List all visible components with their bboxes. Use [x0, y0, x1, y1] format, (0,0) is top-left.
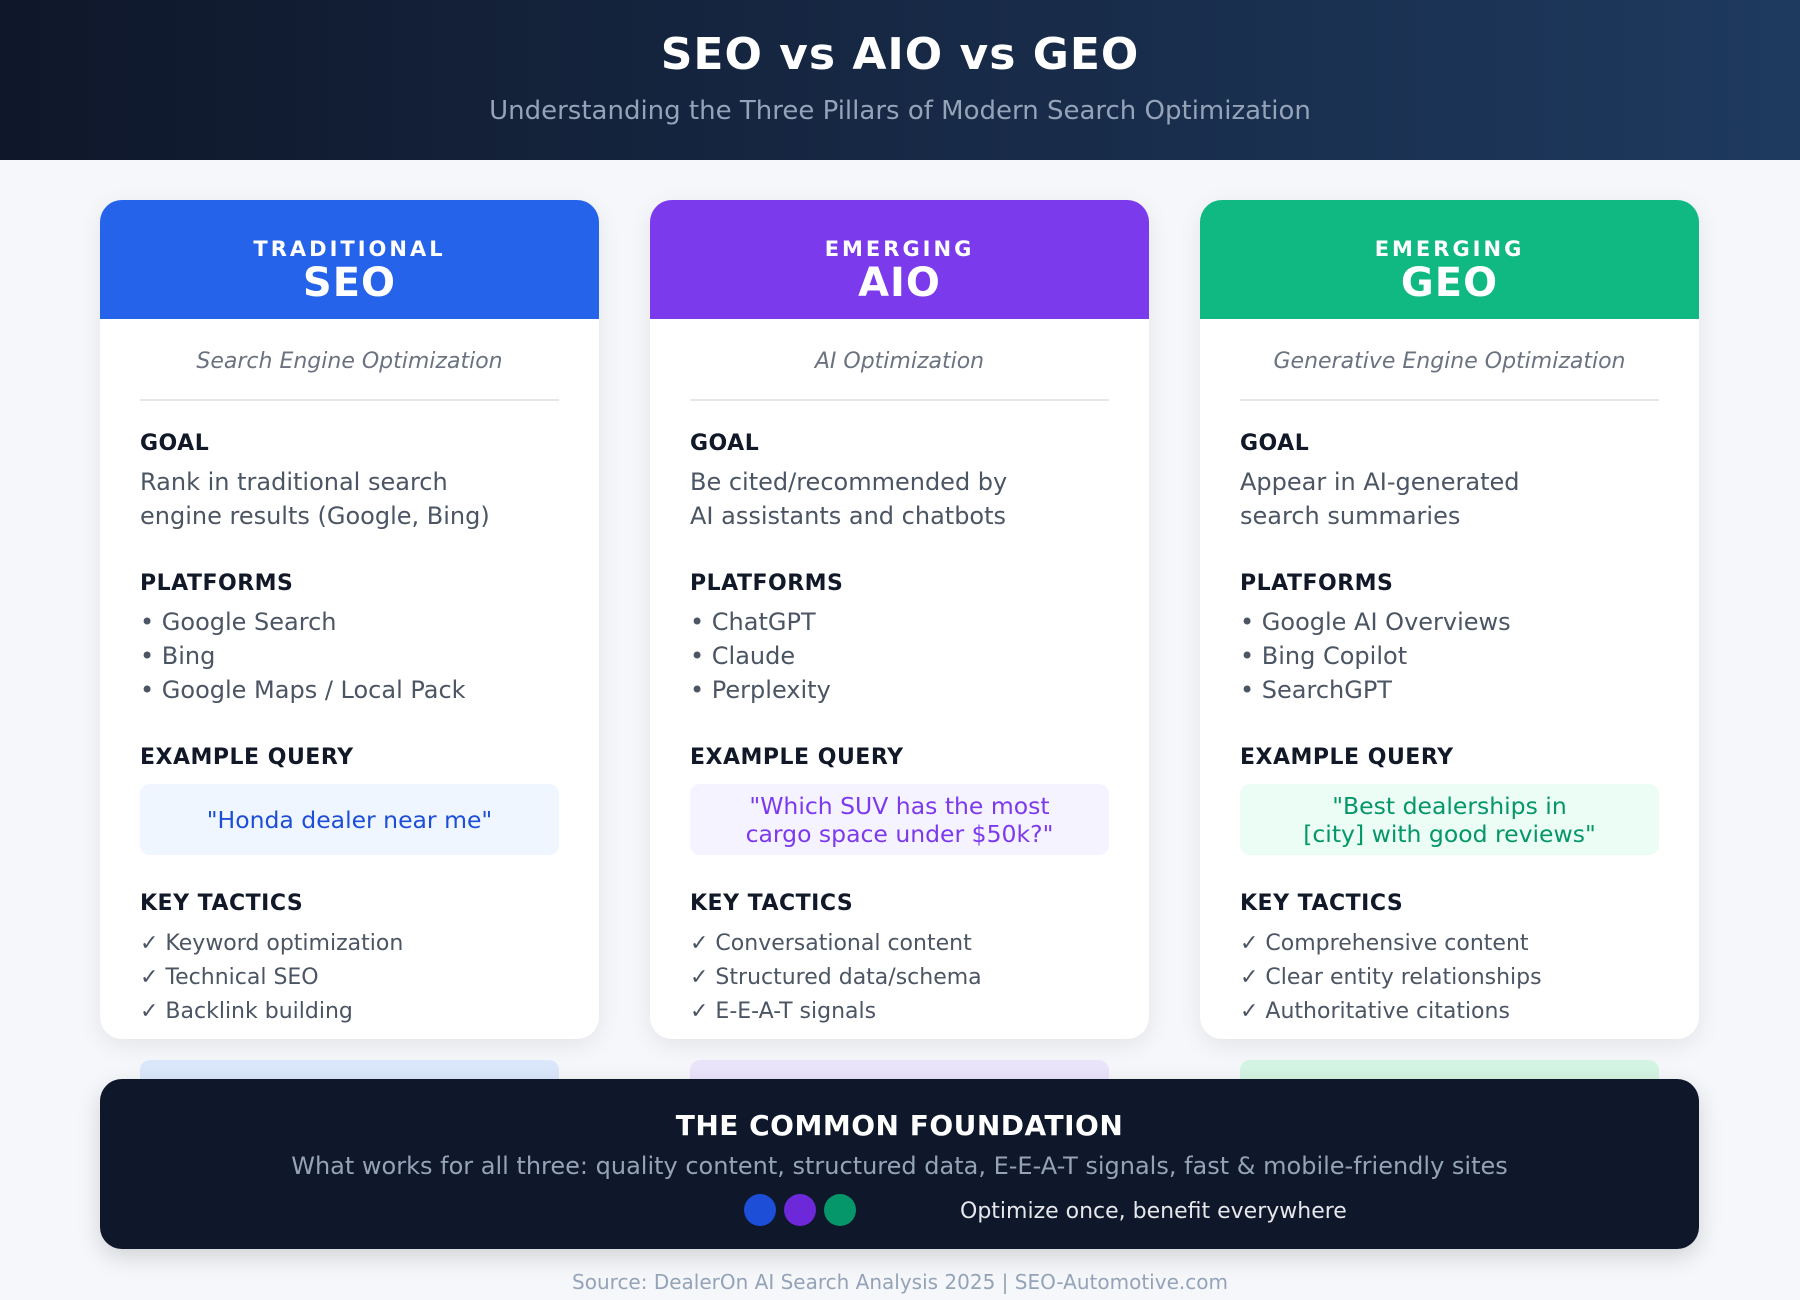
foundation title: THE COMMON FOUNDATION [676, 1109, 1123, 1142]
icon: dots [744, 1194, 856, 1226]
query box: [city] with good reviews" [1303, 820, 1596, 848]
text: goal [1240, 468, 1519, 530]
list: platforms [140, 608, 466, 704]
list: tactics: ✓ Authoritative citations [1240, 999, 1510, 1024]
header band: SEO [100, 200, 599, 319]
heading: goal: GOAL [1240, 431, 1309, 456]
text: goal [690, 468, 1007, 530]
query box: "Best dealerships in [1332, 792, 1567, 820]
text: goal: AI assistants and chatbots [690, 502, 1006, 530]
heading: key tactics: KEY TACTICS [1240, 891, 1403, 916]
query box [1240, 784, 1659, 855]
query box [690, 784, 1109, 855]
heading: goal: GOAL [140, 431, 209, 456]
panel: common foundation [100, 1079, 1699, 1249]
header band: SEO: SEO [303, 260, 396, 306]
list: platforms: • SearchGPT [1240, 676, 1392, 704]
panel: AIO [650, 200, 1149, 1039]
heading: platforms: PLATFORMS [1240, 571, 1393, 596]
query box [140, 784, 559, 855]
text: goal: search summaries [1240, 502, 1460, 530]
ghost tab: blue [140, 1060, 559, 1100]
panel: GEO [1200, 200, 1699, 1039]
heading: key tactics: KEY TACTICS [140, 891, 303, 916]
tagline: Optimize once, benefit everywhere [960, 1199, 1347, 1224]
list: platforms: • Bing Copilot [1240, 642, 1407, 670]
list: tactics: ✓ Conversational content [690, 931, 972, 956]
header band: AIO [650, 200, 1149, 319]
text: goal: engine results (Google, Bing) [140, 502, 490, 530]
header band: GEO: GEO [1401, 260, 1498, 306]
list: platforms: • ChatGPT [690, 608, 816, 636]
heading: platforms: PLATFORMS [690, 571, 843, 596]
ghost tab: purple [690, 1060, 1109, 1100]
query box: "Honda dealer near me" [207, 806, 492, 834]
list: platforms [690, 608, 831, 704]
header [0, 0, 1800, 160]
subtitle: GEO: Generative Engine Optimization [1274, 349, 1626, 374]
subtitle: Understanding the Three Pillars of Modern Search Optimization [489, 96, 1311, 126]
list: tactics: ✓ E-E-A-T signals [690, 999, 876, 1024]
list: tactics [140, 931, 403, 1024]
subtitle: AIO: AI Optimization [815, 349, 984, 374]
list: platforms: • Bing [140, 642, 215, 670]
list: tactics: ✓ Backlink building [140, 999, 353, 1024]
list: platforms: • Google AI Overviews [1240, 608, 1511, 636]
source: Source: DealerOn AI Search Analysis 2025 | SEO-Automotive.com [572, 1270, 1228, 1294]
header band: SEO: TRADITIONAL [253, 237, 446, 261]
header band: AIO: AIO [858, 260, 941, 306]
heading: platforms: PLATFORMS [140, 571, 293, 596]
text: goal: Appear in AI-generated [1240, 468, 1519, 496]
query box: cargo space under $50k?" [746, 820, 1053, 848]
list: platforms [1240, 608, 1511, 704]
heading: example query: EXAMPLE QUERY [690, 745, 904, 770]
list: tactics [1240, 931, 1542, 1024]
title: SEO vs AIO vs GEO [661, 29, 1139, 80]
list: tactics [690, 931, 982, 1024]
list: platforms: • Google Maps / Local Pack [140, 676, 466, 704]
ghost tab: green [1240, 1060, 1659, 1100]
heading: example query: EXAMPLE QUERY [140, 745, 354, 770]
header band: GEO [1200, 200, 1699, 319]
list: platforms: • Google Search [140, 608, 336, 636]
heading: example query: EXAMPLE QUERY [1240, 745, 1454, 770]
query box: "Which SUV has the most [749, 792, 1050, 820]
list: platforms: • Claude [690, 642, 795, 670]
text: goal: Be cited/recommended by [690, 468, 1007, 496]
heading: key tactics: KEY TACTICS [690, 891, 853, 916]
text: goal: Rank in traditional search [140, 468, 448, 496]
list: tactics: ✓ Keyword optimization [140, 931, 403, 956]
header band: AIO: EMERGING [825, 237, 974, 261]
list: platforms: • Perplexity [690, 676, 831, 704]
list: tactics: ✓ Comprehensive content [1240, 931, 1529, 956]
list: tactics: ✓ Technical SEO [140, 965, 319, 990]
heading: goal: GOAL [690, 431, 759, 456]
header band: GEO: EMERGING [1375, 237, 1524, 261]
text: goal [140, 468, 490, 530]
list: tactics: ✓ Structured data/schema [690, 965, 982, 990]
list: tactics: ✓ Clear entity relationships [1240, 965, 1542, 990]
subtitle: SEO: Search Engine Optimization [196, 349, 503, 374]
foundation text: What works for all three: quality content, structured data, E-E-A-T signals, fast & mobile-friendly sites [291, 1152, 1508, 1180]
panel: SEO [100, 200, 599, 1039]
